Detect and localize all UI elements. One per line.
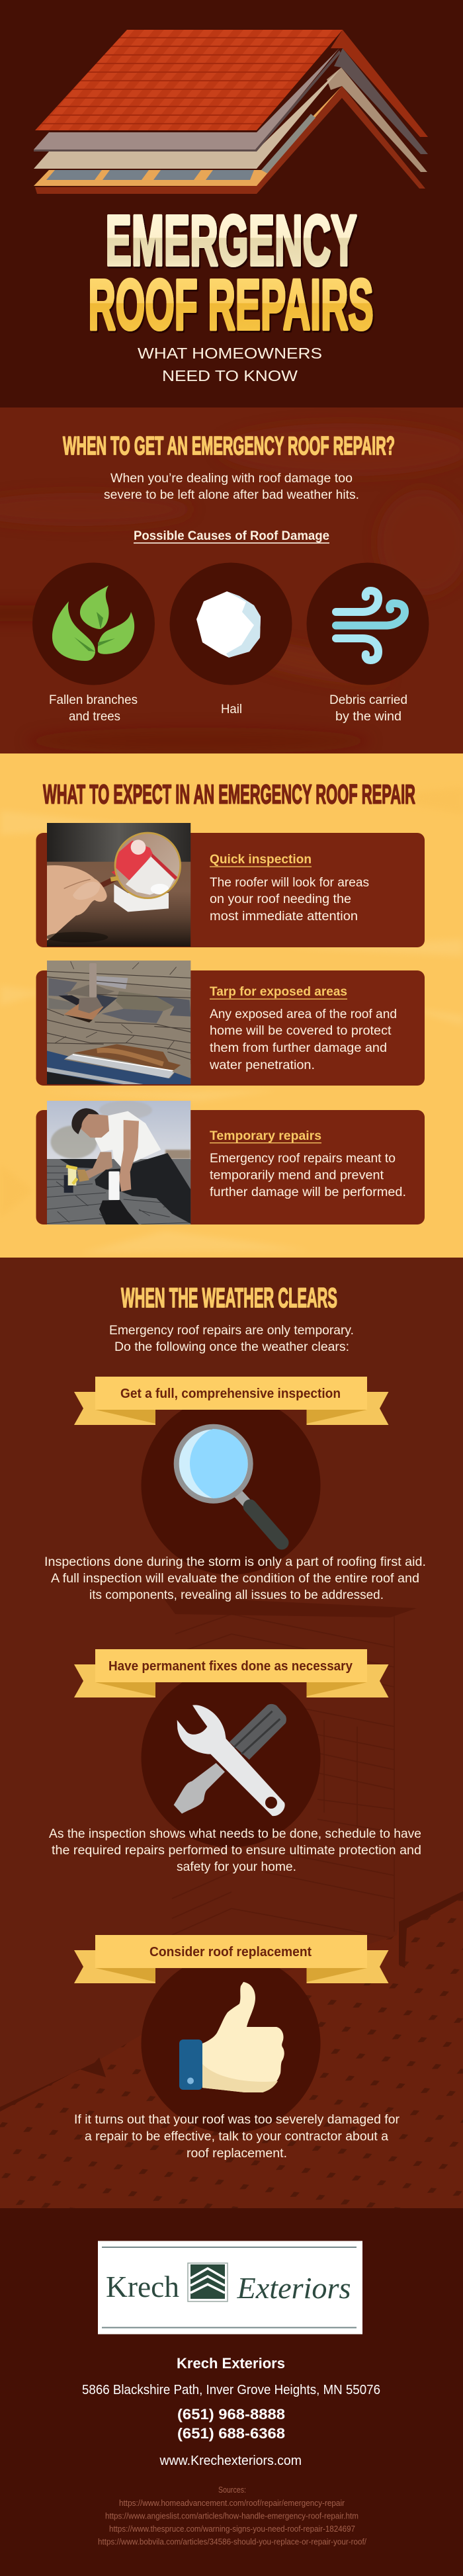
sources: https://www.bobvila.com/articles/34586-should-you-replace-or-repair-your-roof/ (98, 2536, 366, 2547)
contact details: Krech Exteriors (177, 2355, 285, 2372)
inspection text: A full inspection will evaluate the condition of the entire roof and (51, 1572, 419, 1586)
panel: when the weather clears (0, 1258, 463, 2208)
panel: what to expect (0, 753, 463, 1258)
ribbon: full inspection (74, 1377, 389, 1425)
card: temporary repairs (36, 1101, 425, 1224)
ribbon: roof replacement (74, 1935, 389, 1983)
subheading: possible causes: Possible Causes of Roof Damage (134, 529, 329, 543)
title (89, 200, 373, 344)
photo: magnifier over house (46, 823, 190, 947)
replacement text (74, 2113, 400, 2161)
intro text (109, 1324, 354, 1354)
ribbon: permanent fixes (74, 1649, 389, 1697)
card text: Any exposed area of the roof and (210, 1008, 397, 1021)
card text: most immediate attention (210, 910, 358, 923)
contact details: 5866 Blackshire Path, Inver Grove Heights, MN 55076 (82, 2382, 380, 2397)
photo: roofer at work (47, 1101, 190, 1224)
inspection text: its components, revealing all issues to be addressed. (89, 1588, 384, 1602)
card text: The roofer will look for areas (210, 876, 369, 890)
sources: Sources: (218, 2485, 246, 2495)
panel: when to get a repair (0, 408, 463, 754)
contact details (82, 2355, 380, 2468)
cause labels: Hail (221, 703, 242, 716)
replacement text: If it turns out that your roof was too severely damaged for (74, 2113, 400, 2127)
card text (209, 985, 397, 1072)
permanent fixes text: As the inspection shows what needs to be done, schedule to have (49, 1827, 421, 1841)
card: tarp for exposed areas (36, 961, 425, 1086)
card text: Quick inspection (210, 853, 312, 867)
cause labels: and trees (69, 710, 120, 724)
replacement text: a repair to be effective, talk to your contractor about a (85, 2130, 388, 2143)
card text: on your roof needing the (210, 892, 351, 906)
cause labels: Fallen branches (49, 693, 138, 707)
permanent fixes text: the required repairs performed to ensure ultimate protection and (52, 1844, 421, 1858)
card text: Tarp for exposed areas (210, 985, 347, 999)
sources: https://www.angieslist.com/articles/how-handle-emergency-roof-repair.htm (105, 2511, 358, 2520)
card text: them from further damage and (210, 1041, 387, 1055)
cause labels (49, 693, 407, 724)
cause labels: Debris carried (329, 693, 407, 707)
footer background (0, 2208, 463, 2576)
logo: Krech Exteriors: Krech (106, 2270, 179, 2303)
icon: logo chevrons (188, 2263, 228, 2301)
card text: further damage will be performed. (210, 1185, 406, 1199)
icon: hail (169, 562, 292, 685)
photo: damaged shingles (47, 961, 190, 1084)
card text (210, 853, 369, 923)
inspection text: Inspections done during the storm is only a part of roofing first aid. (44, 1555, 426, 1569)
illustration: layered roof (34, 30, 428, 194)
card text: home will be covered to protect (210, 1024, 392, 1038)
sources (98, 2485, 366, 2547)
logo: Krech Exteriors: Exteriors (236, 2271, 351, 2305)
icon: wrench and screwdriver (142, 1668, 320, 1847)
permanent fixes text (49, 1827, 421, 1874)
card text: temporarily mend and prevent (210, 1168, 384, 1183)
intro text: severe to be left alone after bad weather hits. (104, 488, 359, 502)
icon: thumbs up (142, 1954, 320, 2133)
logo: Krech Exteriors (98, 2241, 362, 2334)
inspection text (44, 1555, 426, 1602)
contact details: www.Krechexteriors.com (159, 2453, 302, 2468)
intro text (104, 471, 359, 502)
card text: water penetration. (209, 1058, 315, 1072)
card: quick inspection (36, 823, 425, 947)
card text (210, 1129, 406, 1199)
intro text: Do the following once the weather clears: (114, 1340, 349, 1354)
ribbon: full inspection: Get a full, comprehensive inspection (120, 1387, 341, 1401)
intro text: When you’re dealing with roof damage too (110, 471, 353, 486)
cause labels: by the wind (335, 710, 401, 724)
sources: https://www.thespruce.com/warning-signs-you-need-roof-repair-1824697 (109, 2524, 355, 2534)
contact details: (651) 688-6368 (177, 2425, 285, 2442)
icon: leaves (32, 562, 155, 685)
subtitle (138, 345, 322, 384)
sources: https://www.homeadvancement.com/roof/repair/emergency-repair (119, 2498, 345, 2508)
ribbon: roof replacement: Consider roof replacement (149, 1945, 312, 1959)
ribbon: permanent fixes: Have permanent fixes done as necessary (108, 1659, 353, 1674)
header background (0, 0, 463, 408)
subtitle: NEED TO KNOW (162, 367, 298, 384)
card text: Emergency roof repairs meant to (210, 1152, 396, 1166)
icon: magnifying glass (142, 1396, 320, 1574)
replacement text: roof replacement. (187, 2147, 287, 2161)
permanent fixes text: safety for your home. (177, 1860, 296, 1874)
contact details: (651) 968-8888 (177, 2406, 285, 2423)
card text: Temporary repairs (210, 1129, 321, 1143)
subtitle: WHAT HOMEOWNERS (138, 345, 322, 362)
intro text: Emergency roof repairs are only temporary. (109, 1324, 354, 1338)
icon: wind (307, 562, 429, 685)
